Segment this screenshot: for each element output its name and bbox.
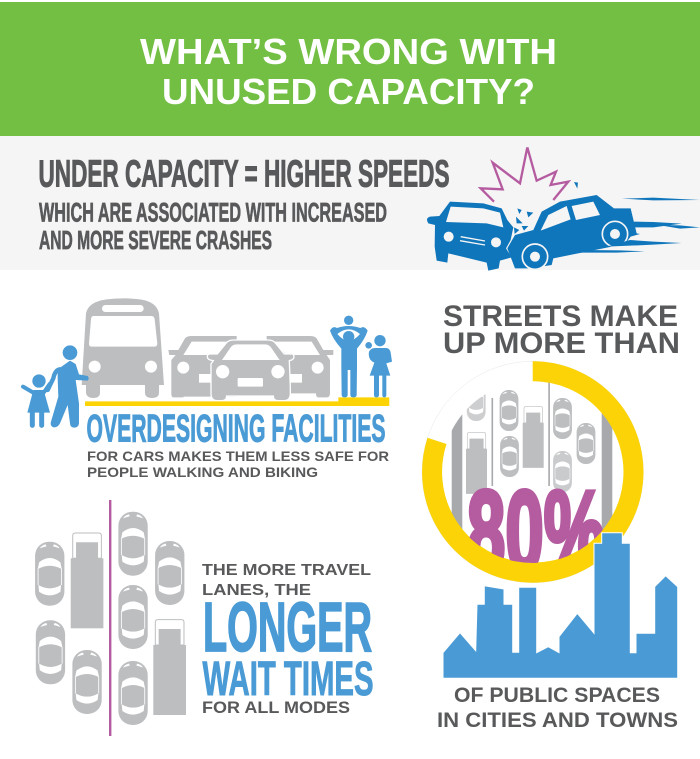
panel: under capacity — [0, 136, 700, 271]
text: crashes: WHICH ARE ASSOCIATED WITH INCREASED — [39, 198, 387, 228]
text: more travel lanes: LANES, THE — [202, 582, 311, 599]
heading: longer wait times: LONGER — [203, 588, 372, 666]
title: WHAT’S WRONG WITH — [140, 31, 557, 72]
heading: streets make up more than: UP MORE THAN — [443, 327, 680, 360]
icon: adult and child walking — [23, 345, 89, 428]
text: crashes: AND MORE SEVERE CRASHES — [39, 225, 272, 255]
icon: bus — [82, 298, 164, 398]
text: for all modes: FOR ALL MODES — [202, 699, 350, 717]
icon: yellow curb — [85, 397, 389, 406]
title: UNUSED CAPACITY? — [162, 71, 535, 112]
text: overdesigning body: FOR CARS MAKES THEM LESS SAFE FOR — [87, 448, 389, 464]
heading: overdesigning facilities: OVERDESIGNING FACILITIES — [86, 408, 386, 450]
text: of public spaces — [437, 684, 678, 732]
number: 80%: 80% — [467, 468, 605, 596]
text: of public spaces: OF PUBLIC SPACES — [454, 684, 660, 707]
text: overdesigning body: PEOPLE WALKING AND BIKING — [87, 464, 318, 480]
icon: back cars — [168, 336, 333, 397]
chart: 80 percent ring — [422, 361, 643, 583]
illustration: street scene — [82, 298, 389, 406]
text: overdesigning body — [87, 448, 389, 480]
heading: longer wait times — [202, 588, 374, 706]
header banner — [0, 2, 700, 136]
icon: car crash — [427, 147, 700, 271]
icon: front car — [207, 340, 294, 401]
text: crashes — [39, 198, 387, 255]
heading: streets make up more than: STREETS MAKE — [443, 300, 678, 333]
panel: travel lanes — [35, 500, 373, 736]
icon: woman holding baby — [365, 335, 392, 397]
illustration: street inside ring — [452, 382, 612, 530]
text: of public spaces: IN CITIES AND TOWNS — [437, 709, 678, 732]
text: more travel lanes: THE MORE TRAVEL — [202, 562, 371, 579]
title — [140, 31, 557, 112]
panel: overdesigning facilities — [23, 298, 392, 480]
heading: longer wait times: WAIT TIMES — [202, 653, 374, 706]
icon: adult with child on shoulders — [330, 316, 368, 397]
illustration: lanes with cars and trucks — [35, 500, 186, 736]
icon: city skyline — [443, 533, 678, 678]
text: more travel lanes — [202, 562, 371, 599]
panel: streets 80 percent — [422, 300, 680, 732]
heading: streets make up more than — [443, 300, 680, 360]
